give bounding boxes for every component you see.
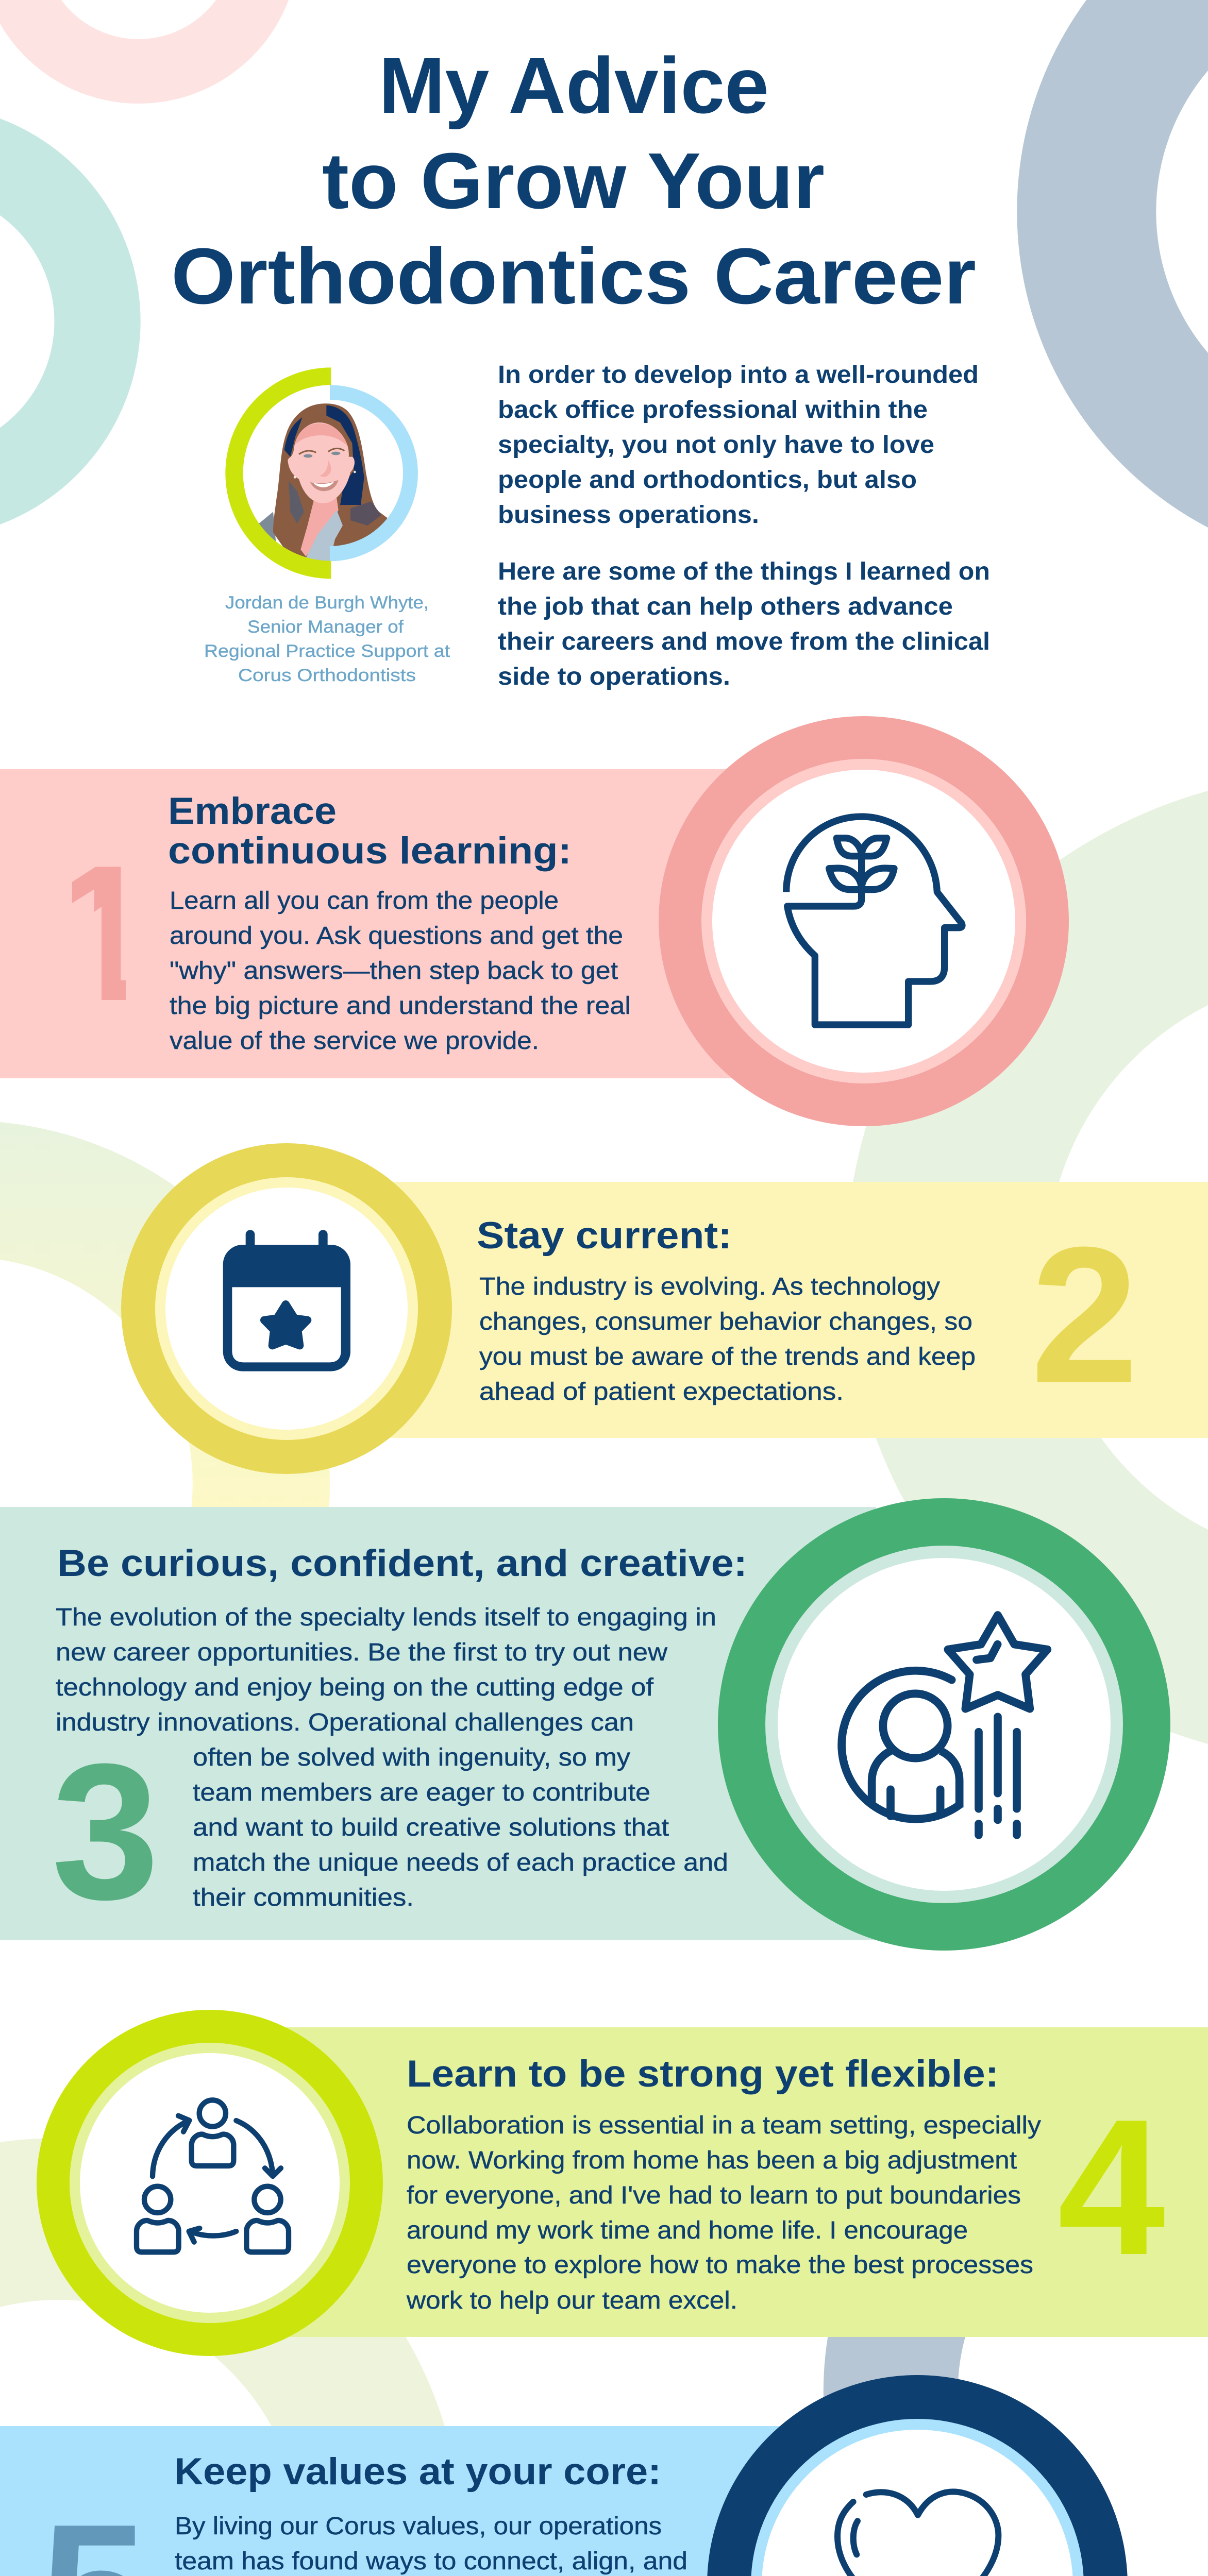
body text 4: Collaboration is essential in a team setting, especially	[407, 2112, 1041, 2139]
panel: tip 4 learn to be strong yet flexible	[37, 2010, 1208, 2356]
body text 3: match the unique needs of each practice and	[193, 1849, 728, 1876]
body text 1: "why" answers—then step back to get	[170, 957, 618, 985]
panel: tip 1 embrace continuous learning	[0, 716, 1069, 1126]
intro text: Here are some of the things I learned on	[498, 558, 990, 585]
ring badge 4	[37, 2010, 383, 2356]
ring badge 5	[707, 2375, 1128, 2576]
intro text: people and orthodontics, but also	[498, 466, 917, 494]
intro text: In order to develop into a well-rounded	[498, 361, 979, 388]
body text 3: team members are eager to contribute	[193, 1779, 650, 1806]
intro text: back office professional within the	[498, 396, 928, 423]
intro text: side to operations.	[498, 663, 730, 690]
author caption: Corus Orthodontists	[238, 666, 416, 685]
body text 4: everyone to explore how to make the best processes	[407, 2251, 1033, 2279]
body text 5	[174, 2513, 687, 2576]
body text 3: technology and enjoy being on the cutting edge of	[56, 1674, 654, 1701]
body text 5: team has found ways to connect, align, and	[175, 2548, 687, 2575]
body text 2	[479, 1273, 976, 1405]
body text 3: often be solved with ingenuity, so my	[193, 1744, 630, 1771]
body text 1: Learn all you can from the people	[170, 887, 559, 914]
heading 5: Keep values at your core:	[174, 2451, 661, 2493]
body text 5: By living our Corus values, our operations	[175, 2513, 662, 2540]
body text 4: now. Working from home has been a big adjustment	[407, 2147, 1017, 2174]
intro text: their careers and move from the clinical	[498, 628, 990, 655]
title: Orthodontics Career	[171, 232, 976, 320]
body text 3: new career opportunities. Be the first to try out new	[56, 1639, 667, 1666]
intro text: the job that can help others advance	[498, 593, 953, 620]
body text 3: The evolution of the specialty lends itself to engaging in	[56, 1604, 716, 1631]
body text 1: around you. Ask questions and get the	[170, 922, 623, 950]
icon: person with shooting star	[842, 1615, 1047, 1835]
heading 1: continuous learning:	[168, 830, 572, 872]
intro text: specialty, you not only have to love	[498, 431, 934, 459]
ring badge 3	[718, 1498, 1170, 1951]
body text 4: around my work time and home life. I encourage	[407, 2217, 968, 2244]
panel: tip 5 keep values at your core	[0, 2375, 1128, 2576]
heading 4: Learn to be strong yet flexible:	[407, 2053, 999, 2095]
body text 4	[406, 2112, 1041, 2314]
body text 3: their communities.	[193, 1884, 414, 1911]
icon: head with sprouting plant	[786, 817, 962, 1025]
panel: tip 2 stay current	[121, 1143, 1208, 1474]
body text 3: industry innovations. Operational challenges can	[56, 1709, 634, 1736]
heading 3: Be curious, confident, and creative:	[57, 1543, 747, 1584]
body text 2: changes, consumer behavior changes, so	[479, 1308, 972, 1335]
title: to Grow Your	[322, 137, 825, 225]
body text 2: you must be aware of the trends and keep	[479, 1343, 976, 1370]
title: My Advice	[379, 41, 769, 130]
author portrait with split ring	[225, 367, 418, 579]
number 2: 2	[1031, 1207, 1138, 1423]
number 3: 3	[52, 1723, 159, 1940]
number 1: 1	[49, 825, 157, 1041]
body text 1: value of the service we provide.	[170, 1027, 539, 1055]
ring badge 2	[121, 1143, 452, 1474]
icon: three people in a cycle	[137, 2100, 289, 2252]
panel: tip 3 be curious, confident, and creative	[0, 1498, 1170, 1951]
ring badge 1	[659, 716, 1069, 1126]
author caption: Jordan de Burgh Whyte,	[225, 593, 429, 613]
intro text: business operations.	[498, 501, 759, 529]
body text 4: for everyone, and I've had to learn to put boundaries	[407, 2182, 1021, 2209]
heading 2: Stay current:	[477, 1215, 732, 1257]
body text 4: work to help our team excel.	[406, 2287, 737, 2314]
heading 1	[168, 790, 572, 872]
title	[171, 41, 976, 320]
body text 1: the big picture and understand the real	[170, 992, 631, 1020]
icon: heart above open hand	[837, 2492, 998, 2576]
author caption: Senior Manager of	[247, 617, 404, 637]
body text 3: and want to build creative solutions that	[193, 1814, 669, 1841]
body text 2: The industry is evolving. As technology	[479, 1273, 940, 1300]
body text 3	[56, 1604, 728, 1911]
heading 1: Embrace	[168, 790, 337, 832]
intro text	[498, 361, 990, 690]
author caption	[204, 593, 450, 685]
body text 1	[170, 887, 631, 1055]
number 4: 4	[1058, 2079, 1167, 2295]
icon: calendar with star	[223, 1230, 350, 1371]
body text 2: ahead of patient expectations.	[479, 1378, 844, 1405]
author caption: Regional Practice Support at	[204, 641, 450, 661]
